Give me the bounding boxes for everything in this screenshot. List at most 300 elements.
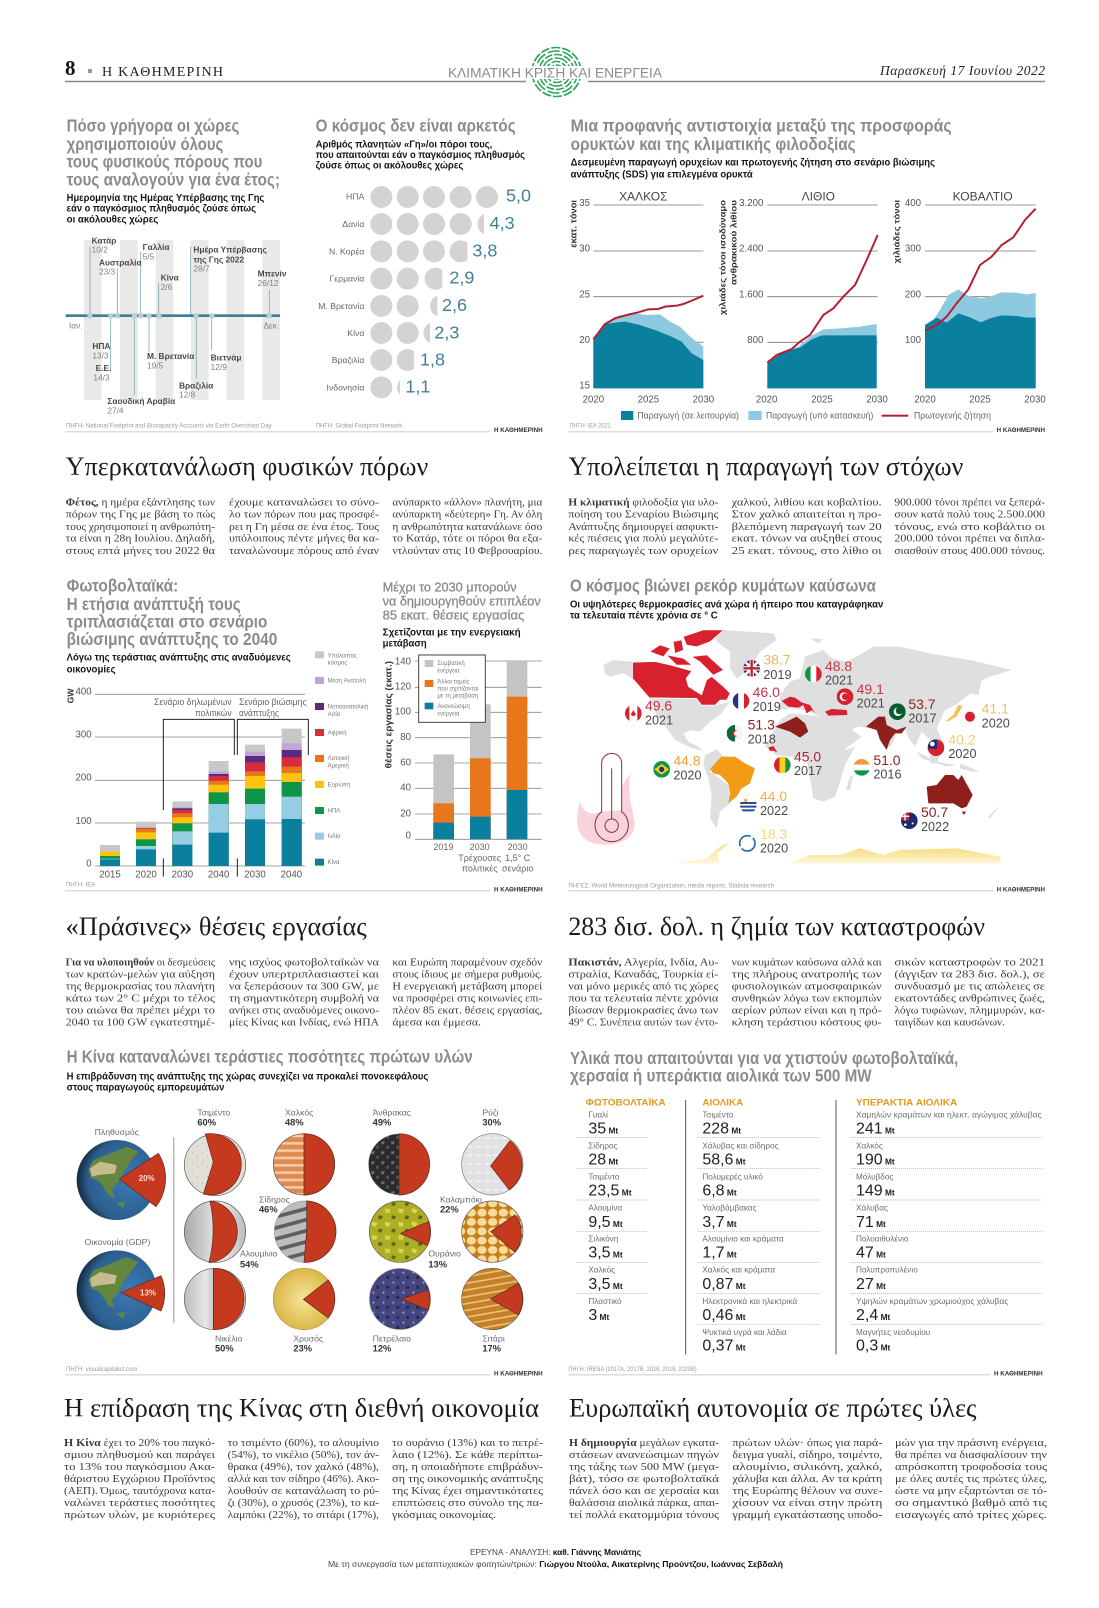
subheading: εάν ο παγκόσμιος πληθυσμός ζούσε όπως xyxy=(67,204,256,215)
body text: να προσφέρει στις κοινωνίες επι- xyxy=(392,994,543,1005)
body text: ση της οικονομικής ανάπτυξης xyxy=(392,1474,544,1485)
chart: lithium: χιλιάδες τόνοι ισοδύναμο xyxy=(717,200,727,315)
stacked bar chart: πολιτικών xyxy=(195,708,232,718)
pie: coal 49% xyxy=(368,1108,430,1195)
pie: iron 46%: 46% xyxy=(259,1205,278,1215)
pie: rice 30% xyxy=(462,1108,523,1195)
row: Brazil: Βραζιλία xyxy=(332,355,364,365)
timeline labels: 2/6 xyxy=(161,282,173,292)
article: European autonomy xyxy=(569,1394,1048,1521)
label: France: 2019 xyxy=(753,700,781,714)
credits: ΕΡΕΥΝΑ - ΑΝΑΛΥΣΗ: καθ. Γιάννης Μανιάτης xyxy=(470,1547,642,1557)
subheading: τα τελευταία πέντε χρόνια σε ° C xyxy=(570,610,718,621)
label: Turkey xyxy=(836,684,884,708)
source: ΠΗΓΗ: visualcapitalist.com xyxy=(66,1367,137,1373)
label: Algeria xyxy=(726,720,776,744)
subheading: που απαιτούνται εάν ο παγκόσμιος πληθυσμός xyxy=(316,150,525,161)
pie: uranium 13%: Ουράνιο xyxy=(428,1249,461,1259)
column: onshore wind xyxy=(698,1098,820,1355)
body text: τους χρησιμοποιεί η ανθρωπότη- xyxy=(66,522,216,533)
body text: απρόσκοπτη τροφοδοσία τους xyxy=(895,1462,1048,1473)
body text: θα πρέπει να διασφαλίσουν την xyxy=(895,1450,1047,1461)
page number: 8 xyxy=(65,56,76,80)
label: Uruguay: 44.0 xyxy=(760,788,787,804)
body text: βίωσαν θερμοκρασίες άνω των xyxy=(568,1005,719,1016)
pie: copper 48% xyxy=(273,1108,335,1195)
timeline labels: Βραζιλία xyxy=(179,380,214,390)
body text: το Κατάρ, τότε οι πόροι θα εξα- xyxy=(392,534,543,545)
label: Brazil: 44.8 xyxy=(673,752,701,768)
body text: συνδυασμό με τις απώλειες σε xyxy=(894,981,1046,992)
column: solar: 3,5Mt xyxy=(588,1245,623,1262)
body text: Η ενεργειακή μετάβαση μπορεί xyxy=(392,981,543,992)
subheading: μετάβαση xyxy=(383,639,427,650)
body text: τη σημαντικότερη συμβολή να xyxy=(229,994,380,1005)
body text: στους επτά μήνες του 2022 θα xyxy=(66,546,216,557)
body text: ρει η Γη μέσα σε ένα έτος. Τους xyxy=(229,522,380,533)
column: offshore wind: 149Mt xyxy=(856,1183,895,1200)
column: onshore wind: 6,8Mt xyxy=(702,1183,737,1200)
bar chart: 40 xyxy=(400,783,411,794)
chart: cobalt: 200 xyxy=(905,289,921,300)
heading: Μια προφανής αντιστοιχία μεταξύ της προσφοράς xyxy=(571,116,952,137)
label: UK xyxy=(743,655,791,679)
body text: λαιο (12%). Σε κάθε περίπτω- xyxy=(392,1450,544,1461)
body text: εκατοντάδες ανθρώπινες ζωές, xyxy=(894,994,1045,1005)
row: UK: Μ. Βρετανία xyxy=(318,301,364,311)
timeline labels: Αυστραλία xyxy=(99,257,142,267)
row: Denmark xyxy=(342,213,515,235)
heading: Πόσο γρήγορα οι χώρες xyxy=(67,116,239,136)
bar chart: 120 xyxy=(395,682,411,693)
column: offshore wind: Μαγνήτες νεοδυμίου xyxy=(856,1328,931,1337)
chart: lithium: ΛΙΘΙΟ xyxy=(802,190,835,204)
column: solar: 3Mt xyxy=(588,1307,609,1324)
pie: nickel 50%: 50% xyxy=(215,1344,234,1354)
credits: Με τη συνεργασία των μεταπτυχιακών φοιτητών/τριών: Γιώργου Ντούλα, Αικατερίνης Προύντζου, Ιωάννας Σεβδαλή xyxy=(328,1559,783,1569)
timeline axis xyxy=(66,247,280,395)
column: solar: 23,5Mt xyxy=(588,1183,632,1200)
section title: ΚΛΙΜΑΤΙΚΗ ΚΡΙΣΗ ΚΑΙ ΕΝΕΡΓΕΙΑ xyxy=(448,64,663,80)
body text: σιασθούν στους 400.000 τόνους. xyxy=(894,546,1045,557)
body text xyxy=(66,498,543,557)
body text: σο σημαντικό βαθμό από τις xyxy=(895,1498,1048,1509)
bar chart: Τρέχουσες xyxy=(458,853,502,863)
label: Brazil xyxy=(653,756,701,780)
label: France: 46.0 xyxy=(753,684,780,700)
row: USA xyxy=(346,186,531,208)
column: onshore wind: 58,6Mt xyxy=(702,1151,746,1168)
world map xyxy=(603,630,1012,863)
body text: της τάξης των 500 MW (μεγα- xyxy=(569,1462,720,1473)
subheading: Οι υψηλότερες θερμοκρασίες ανά χώρα ή ήπειρο που καταγράφηκαν xyxy=(570,599,884,610)
panel: heatwave world map xyxy=(568,576,1045,894)
column: solar: Αλουμίνα xyxy=(588,1204,622,1213)
label: Taiwan: 2020 xyxy=(948,747,976,761)
chart: cobalt: χιλιάδες τόνοι xyxy=(891,199,901,263)
body text: Ανάπτυξης δημιουργεί ασφυκτι- xyxy=(568,522,719,533)
body text: νης ισχύος φωτοβολταϊκών να xyxy=(229,958,380,969)
body text: επιπτώσεις στο σύνολο της πα- xyxy=(392,1498,544,1509)
body text: της πλήρους ανατροπής των xyxy=(732,969,882,980)
label: UK: 2019 xyxy=(763,668,791,682)
western hemisphere xyxy=(603,630,797,863)
subheading xyxy=(316,140,525,171)
chart: copper: ΧΑΛΚΟΣ xyxy=(619,190,668,204)
column: onshore wind: ΑΙΟΛΙΚΑ xyxy=(702,1098,744,1108)
legend box xyxy=(419,655,485,722)
body text: κές πιέσεις για πολύ μεγαλύτε- xyxy=(568,534,719,545)
row: UK: 2,6 xyxy=(442,295,467,315)
label: Antarctica: 2020 xyxy=(760,842,788,856)
label: Turkey: 49.1 xyxy=(857,681,884,697)
source: ΠΗΓΗ: IRENA (2017A, 2017B, 2018, 2019, 2020B) xyxy=(568,1367,697,1373)
label: Japan: 2020 xyxy=(982,716,1010,730)
rule and credit: Η ΚΑΘΗΜΕΡΙΝΗ xyxy=(994,1372,1043,1378)
stacked bar chart: 2040 xyxy=(281,869,302,880)
Brazil xyxy=(710,757,755,803)
source: ΠΗΓΗ: National Footprint and Biocapacity Accounts via Earth Overshoot Day xyxy=(66,423,272,429)
body text xyxy=(568,497,1046,557)
column: offshore wind: 2,4Mt xyxy=(856,1307,891,1324)
chart: copper xyxy=(569,190,714,405)
column: onshore wind: Χάλυβας και σίδηρος xyxy=(702,1141,779,1150)
bar chart: 1,5° C xyxy=(505,853,531,863)
heading: χερσαία ή υπεράκτια αιολικά των 500 MW xyxy=(570,1066,872,1086)
chart: cobalt: 2025 xyxy=(969,394,991,405)
column: onshore wind: 3,7Mt xyxy=(702,1214,737,1231)
body text: (54%), το νικέλιο (50%), τον άν- xyxy=(228,1450,380,1461)
body text: μών για την πράσινη ενέργεια, xyxy=(895,1438,1047,1449)
body text: στους ίδιους με σήμερα ρυθμούς. xyxy=(392,969,542,980)
column: offshore wind: Πολυαιθυλένιο xyxy=(856,1235,909,1244)
page rule xyxy=(65,80,1045,82)
body text: υπόλοιπους πέντε μήνες θα κα- xyxy=(229,534,380,545)
column: onshore wind: 228Mt xyxy=(702,1120,741,1137)
bar chart: πολιτικές xyxy=(462,864,498,874)
newspaper name: Η ΚΑΘΗΜΕΡΙΝΗ xyxy=(102,65,223,80)
column: solar: 3,5Mt xyxy=(588,1276,623,1293)
row: Denmark: 4,3 xyxy=(490,213,515,233)
timeline labels: 28/7 xyxy=(193,263,210,273)
pie: corn 22% xyxy=(440,1195,523,1262)
pie: uranium 13%: 13% xyxy=(428,1259,448,1269)
label: Italy: 48.8 xyxy=(825,658,852,674)
body text: λόγω τυφώνων, πλημμυρών, κα- xyxy=(894,1005,1046,1016)
legend: Παραγωγή (σε λειτουργία) xyxy=(637,410,739,420)
label: Guinea: 45.0 xyxy=(794,749,821,765)
heading: Η Κίνα καταναλώνει τεράστιες ποσότητες πρώτων υλών xyxy=(67,1047,473,1067)
column: onshore wind: Ηλεκτρονικά και ηλεκτρικά xyxy=(702,1297,797,1306)
pie: iron 46% xyxy=(259,1195,336,1262)
body text: αερίων ρύπων είναι και η πρό- xyxy=(732,1005,882,1016)
body text: ταιγίδων και καυσώνων. xyxy=(894,1017,1005,1028)
panel: materials for 500 MW xyxy=(568,1048,1043,1378)
timeline labels: Γαλλία xyxy=(143,242,170,252)
column: onshore wind: 0,37Mt xyxy=(702,1338,746,1355)
month bands xyxy=(84,240,280,400)
legend: Λατινική xyxy=(328,755,349,762)
bar chart: θέσεις εργασίας (εκατ.) xyxy=(384,661,394,768)
Guinea xyxy=(768,746,777,752)
article: green jobs xyxy=(66,912,543,1028)
heading: τους φυσικούς πόρους που xyxy=(67,152,262,172)
body text: λαμπόκι (22%), το σιτάρι (17%), xyxy=(228,1510,379,1521)
pie: aluminium 54% xyxy=(184,1201,278,1269)
chart: copper: 25 xyxy=(579,289,590,300)
chart: copper: 2020 xyxy=(583,394,604,405)
stacked bar chart: 0 xyxy=(86,859,92,870)
body text: θρακα (49%), τον χαλκό (48%), xyxy=(228,1462,379,1473)
row: Indonesia: 1,1 xyxy=(405,377,430,397)
legend box: ενέργεια xyxy=(437,668,460,675)
headline: 283 δισ. δολ. η ζημία των καταστροφών xyxy=(568,912,985,941)
legend box: ενέργεια xyxy=(437,711,460,718)
chart: lithium: 2030 xyxy=(866,394,888,405)
chart: copper: εκατ. τόνοι xyxy=(569,200,579,248)
body text: των κρατών-μελών για αύξηση xyxy=(66,969,215,980)
stacked bar chart: GW xyxy=(65,688,75,703)
bullet xyxy=(88,69,92,73)
heading xyxy=(67,116,280,189)
legend box: Ανανεώσιμη xyxy=(437,703,470,710)
label: Canada: 49.6 xyxy=(645,698,672,714)
body text: ανήκει στις αναδυόμενες οικονο- xyxy=(229,1005,380,1016)
headline: Υπερκατανάλωση φυσικών πόρων xyxy=(66,452,429,481)
column: onshore wind: Ψυκτικά υγρά και λάδια xyxy=(702,1328,787,1337)
column: solar: Σιλικόνη xyxy=(588,1235,619,1244)
bar chart: 2030 xyxy=(470,842,490,852)
label: Australia: 2022 xyxy=(921,820,949,834)
pie: coal 49%: 49% xyxy=(373,1118,392,1128)
column: offshore wind: 241Mt xyxy=(856,1120,895,1137)
headline: Υπολείπεται η παραγωγή των στόχων xyxy=(568,452,964,481)
pie: wheat 17%: 17% xyxy=(482,1344,502,1354)
UK xyxy=(787,683,797,697)
globe: GDP 13% xyxy=(77,1237,165,1330)
timeline labels: 14/3 xyxy=(93,372,110,382)
body text: που τα τελευταία πέντε χρόνια xyxy=(568,994,719,1005)
label: Pakistan: 2017 xyxy=(908,711,936,725)
row: Denmark: Δανία xyxy=(342,219,364,229)
body text: να ξεπεράσουν τα 300 GW, με xyxy=(229,981,380,992)
chart: cobalt: 2030 xyxy=(1024,394,1046,405)
eastern hemisphere xyxy=(765,638,1012,863)
heading: Ο κόσμος βιώνει ρεκόρ κυμάτων καύσωνα xyxy=(570,576,876,596)
body text: (ΑΕΠ). Όμως, ταυτόχρονα κατα- xyxy=(64,1486,216,1497)
body text: σμιου πληθυσμού και παράγει xyxy=(64,1450,215,1461)
bar chart: 80 xyxy=(400,732,411,743)
body text xyxy=(66,958,543,1028)
body text: πόρων της Γης με βάση το πώς xyxy=(66,510,216,521)
headline: «Πράσινες» θέσεις εργασίας xyxy=(66,912,367,941)
stacked bar chart: 2030 xyxy=(244,869,266,880)
pie: aluminium 54%: 54% xyxy=(240,1259,259,1269)
body text: νων κυμάτων καύσωνα αλλά και xyxy=(732,958,882,969)
article: production shortfall xyxy=(568,452,1046,557)
column: solar: Γυαλί xyxy=(588,1110,608,1119)
chart: lithium: 800 xyxy=(747,335,763,346)
column: onshore wind: 1,7Mt xyxy=(702,1245,737,1262)
label: Taiwan xyxy=(928,735,976,758)
column: offshore wind: 71Mt xyxy=(856,1214,886,1231)
body text: λουθούν σε κατανάλωση το ρύ- xyxy=(228,1486,380,1497)
column: onshore wind: 0,87Mt xyxy=(702,1276,746,1293)
body text: θαλάσσια αιολικά πάρκα, απαι- xyxy=(569,1498,720,1509)
column dividers xyxy=(686,1100,836,1354)
row: UK xyxy=(318,295,467,317)
column: solar: Χαλκός xyxy=(588,1266,615,1275)
subheading: Λόγω της τεράστιας ανάπτυξης στις αναδυόμενες xyxy=(67,653,291,664)
bar chart: 140 xyxy=(395,656,411,667)
legend: Αφρική xyxy=(328,729,347,736)
row: USA: 5,0 xyxy=(506,186,531,206)
body text xyxy=(569,1438,1048,1521)
pie: aluminium 54%: Αλουμίνιο xyxy=(240,1249,278,1259)
France and Italy xyxy=(782,697,815,713)
row: USA: ΗΠΑ xyxy=(346,192,365,202)
label: Algeria: 2018 xyxy=(748,732,776,746)
subheading: στους παραγωγούς εμπορευμάτων xyxy=(67,1083,225,1094)
heading: Φωτοβολταϊκά: xyxy=(67,576,178,596)
pie: nickel 50%: Νικέλιο xyxy=(215,1334,243,1344)
column: offshore wind: 47Mt xyxy=(856,1245,886,1262)
stacked bar chart xyxy=(65,686,308,880)
pie: gold 23% xyxy=(273,1268,335,1354)
column: offshore wind: Υψηλών κραμάτων χρωμιούχος χάλυβας xyxy=(856,1297,1008,1306)
body text: δειγμα γυαλί, σίδηρο, τσιμέντο, xyxy=(732,1450,882,1461)
label: Antarctica xyxy=(740,826,788,856)
label: France xyxy=(732,688,780,711)
Algeria, India, Australia xyxy=(775,717,973,815)
row: South Korea: 3,8 xyxy=(472,241,497,261)
row: South Korea: Ν. Κορέα xyxy=(329,246,364,256)
body text: γκόσμιας οικονομίας. xyxy=(391,1510,496,1521)
body text: σουν κατά πολύ τους 2.500.000 xyxy=(894,510,1045,521)
heading: βιώσιμης ανάπτυξης το 2040 xyxy=(67,629,277,650)
subheading: ανάπτυξης (SDS) για επιλεγμένα ορυκτά xyxy=(571,169,753,180)
legend: κόσμος xyxy=(328,660,347,667)
heading: χρησιμοποιούν όλους xyxy=(67,134,223,154)
chart: cobalt xyxy=(891,190,1046,405)
row: China: 2,3 xyxy=(434,322,459,342)
body text: φυσιολογικών ατμοσφαιρικών xyxy=(732,981,882,992)
label: Taiwan: 40.2 xyxy=(948,732,976,748)
row: Germany: 2,9 xyxy=(449,267,474,287)
body text: 49° C. Συνέπεια αυτών των έντο- xyxy=(568,1017,719,1028)
panel: planets needed circles xyxy=(65,116,543,434)
column: offshore wind: Χάλυβας xyxy=(856,1204,888,1213)
legend box: με τη μετάβαση xyxy=(437,692,478,699)
source: ΠΗΓΗ: IEA xyxy=(66,883,95,889)
body text: αλλά και τον σίδηρο (46%). Ακο- xyxy=(228,1474,380,1485)
pie: uranium 13% xyxy=(369,1201,461,1269)
body text: ναι μόνο μερικές από τις χώρες xyxy=(568,981,719,992)
chart: cobalt: 2020 xyxy=(914,394,936,405)
label: Antarctica: 18.3 xyxy=(760,826,787,842)
subheading xyxy=(383,627,521,650)
column: offshore wind: Χαμηλών κραμάτων και ηλεκτ. αγώγιμος χάλυβας xyxy=(856,1110,1042,1119)
pie: corn 22%: Καλαμπόκι xyxy=(440,1195,482,1205)
label: Brazil: 2020 xyxy=(673,768,701,782)
chart: copper: 20 xyxy=(579,335,590,346)
timeline labels xyxy=(92,235,287,415)
timeline labels: 12/8 xyxy=(179,390,196,400)
body text: χαλκού, λιθίου και κοβαλτίου. xyxy=(730,498,882,509)
stacked bar chart: 2030 xyxy=(172,869,193,880)
body text: 900.000 τόνοι πρέπει να ξεπερά- xyxy=(894,498,1046,509)
label: Guinea: 2017 xyxy=(794,764,822,778)
divider xyxy=(172,1137,175,1323)
body text: ώστε να μην εξαρτώνται σε τό- xyxy=(895,1486,1048,1497)
legend: Κίνα xyxy=(328,860,340,866)
legend: Παραγωγή (υπό κατασκευή) xyxy=(766,410,873,420)
body text: γραμμή εγκατάστασης υποδο- xyxy=(731,1510,883,1521)
subheading: Ημερομηνία της Ημέρας Υπέρβασης της Γης xyxy=(67,193,264,204)
label: India: 51.0 xyxy=(873,752,901,768)
legend: ΗΠΑ xyxy=(328,808,340,814)
pie: coal 49%: Άνθρακας xyxy=(373,1108,411,1118)
column: offshore wind: 190Mt xyxy=(856,1151,895,1168)
Turkey xyxy=(825,709,847,716)
subheading: οι ακόλουθες χώρες xyxy=(67,214,158,225)
column: offshore wind: Χαλκός xyxy=(856,1141,883,1150)
timeline labels: Κατάρ xyxy=(92,235,116,245)
headline: Η επίδραση της Κίνας στη διεθνή οικονομία xyxy=(64,1394,539,1422)
panel: minerals supply and demand xyxy=(568,116,1046,434)
source: ΠΗΓΕΣ: World Meteorological Organization, media reports, Statista research xyxy=(568,883,774,889)
rule and credit: Η ΚΑΘΗΜΕΡΙΝΗ xyxy=(997,888,1045,894)
timeline labels: 23/3 xyxy=(99,267,116,277)
row: Germany: Γερμανία xyxy=(330,274,364,284)
body text: άμεσα και έμμεσα. xyxy=(392,1017,481,1028)
pie: wheat 17%: Σιτάρι xyxy=(482,1334,505,1344)
row: China xyxy=(347,322,459,344)
row: Indonesia: Ινδονησία xyxy=(327,382,364,392)
column: solar: ΦΩΤΟΒΟΛΤΑΪΚΑ xyxy=(586,1098,666,1108)
body text: μίες Κίνας και Ινδίας, ενώ ΗΠΑ xyxy=(229,1017,379,1028)
body text: 2040 τα 100 GW εγκατεστημέ- xyxy=(66,1017,216,1028)
chart: cobalt: 100 xyxy=(905,335,921,346)
label: India: 2016 xyxy=(873,767,901,781)
subheading xyxy=(67,653,291,676)
body text: στάσεων ανανεώσιμων πηγών xyxy=(569,1450,719,1461)
globe: population 20% xyxy=(77,1127,166,1220)
Canada xyxy=(633,630,730,705)
legend: Ευρώπη xyxy=(328,781,350,788)
row: South Korea xyxy=(329,240,497,262)
body text: ρες παραγωγές των ορυχείων xyxy=(568,546,719,557)
heading: να δημιουργηθούν επιπλέον xyxy=(383,595,541,609)
label: Pakistan: 53.7 xyxy=(908,696,936,712)
timeline labels: Μπενίν xyxy=(258,269,287,279)
body text: τα είναι η 28η Ιουλίου. Δηλαδή, xyxy=(66,534,215,545)
panel: energy jobs bars xyxy=(65,581,543,894)
column: onshore wind: 0,46Mt xyxy=(702,1307,746,1324)
subheading: Αριθμός πλανητών «Γη»/οι πόροι τους, xyxy=(316,140,493,151)
heading: ορυκτών και της κλιματικής φιλοδοξίας xyxy=(571,134,856,155)
body text: έχουμε καταναλώσει το σύνο- xyxy=(229,498,380,509)
timeline axis: Δεκ. xyxy=(263,320,279,330)
column: offshore wind: 27Mt xyxy=(856,1276,886,1293)
body text: ποίηση του Σεναρίου Βιώσιμης xyxy=(568,510,719,521)
row: Germany xyxy=(330,267,474,290)
label: UK: 38.7 xyxy=(763,651,791,667)
label: Japan: 41.1 xyxy=(982,700,1009,716)
legend box: Άλλοι τομείς xyxy=(437,679,470,685)
legend: Νοτιοανατολική xyxy=(328,703,368,710)
body text: αλουμίνιο, σιλικόνη, χαλκό, xyxy=(732,1462,882,1473)
